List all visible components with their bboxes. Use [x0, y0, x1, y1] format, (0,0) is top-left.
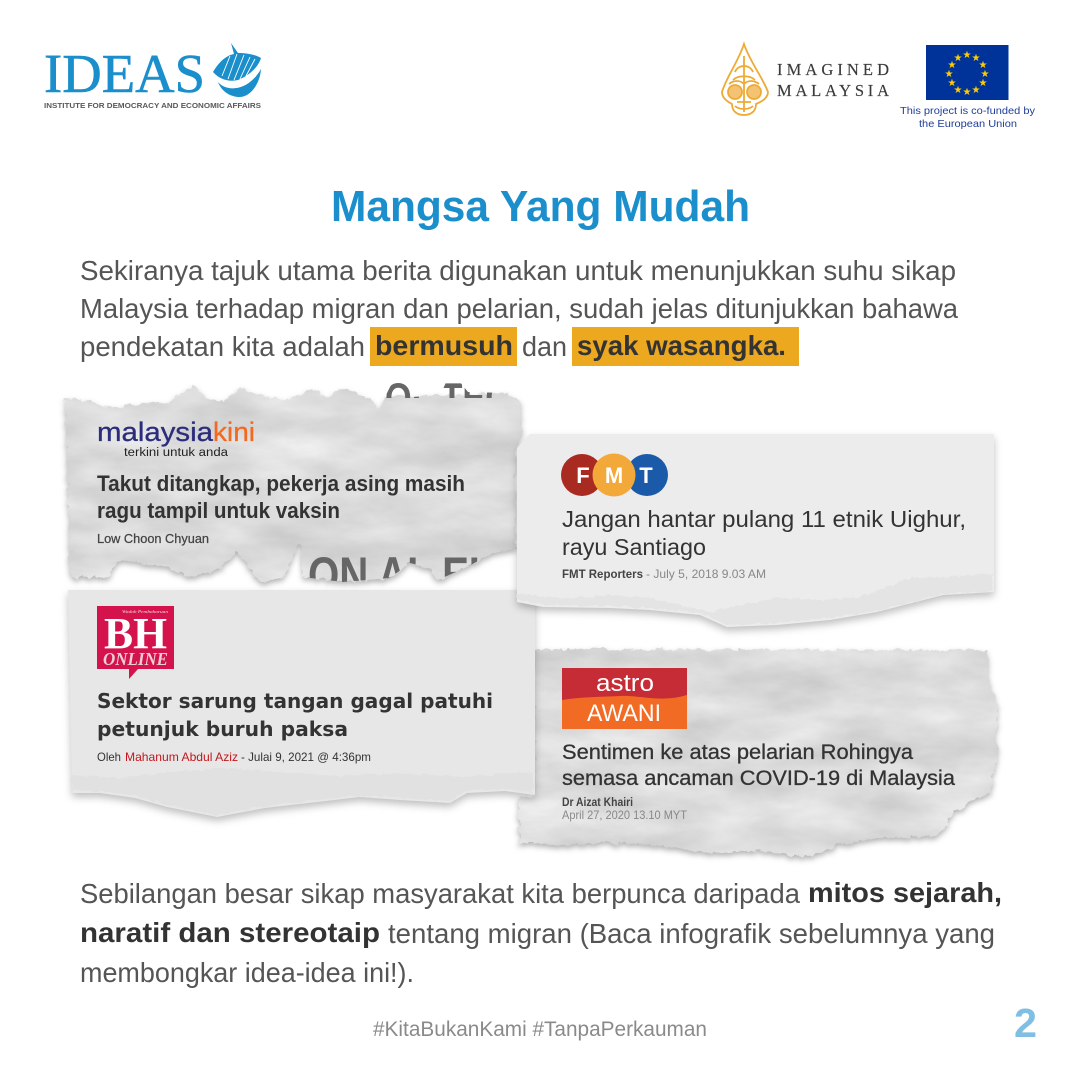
Astro Awani byline: Dr Aizat Khairi: [562, 797, 633, 809]
icon: EU flag: ★: [979, 78, 988, 89]
EU co-funding badge: [900, 45, 1036, 130]
Astro Awani logo: AWANI: [587, 700, 661, 727]
BH Online headline: [97, 689, 493, 741]
torn headline remnant, bottom: ON AL EU: [308, 547, 498, 603]
hashtags: #KitaBukanKami #TanpaPerkauman: [373, 1018, 707, 1041]
BH Online logo: [97, 606, 174, 679]
intro paragraph: Sekiranya tajuk utama berita digunakan untuk menunjukkan suhu sikap: [80, 255, 956, 286]
panel: FMT clipping: [517, 434, 994, 627]
FMT headline: [562, 506, 966, 560]
closing paragraph: [80, 877, 1002, 988]
FMT logo: [561, 454, 668, 496]
torn headline remnant, top: OL TEC: [385, 374, 510, 421]
Malaysiakini headline: Takut ditangkap, pekerja asing masih: [97, 471, 465, 496]
icon: EU flag: [926, 45, 1008, 100]
icon: EU flag: ★: [972, 53, 981, 64]
closing paragraph: mitos sejarah,: [808, 877, 1002, 908]
FMT headline: Jangan hantar pulang 11 etnik Uighur,: [562, 506, 966, 532]
torn paper 3: [68, 590, 535, 817]
FMT byline: - July 5, 2018 9.03 AM: [646, 567, 766, 581]
torn lower edge band: [517, 573, 992, 625]
page number: 2: [1014, 1000, 1037, 1046]
Malaysiakini logo: [97, 417, 255, 459]
torn lower edge band: [71, 768, 533, 815]
BH Online logo: ONLINE: [103, 649, 168, 669]
intro paragraph: pendekatan kita adalah: [80, 331, 365, 362]
FMT headline: rayu Santiago: [562, 534, 706, 560]
EU caption: This project is co-funded by: [900, 105, 1036, 117]
torn paper 1: [65, 385, 522, 583]
IDEAS subtitle: INSTITUTE FOR DEMOCRACY AND ECONOMIC AFFAIRS: [44, 101, 261, 110]
torn paper 2: [517, 434, 994, 627]
Astro Awani headline: Sentimen ke atas pelarian Rohingya: [562, 740, 913, 764]
icon: EU flag: ★: [981, 69, 990, 80]
Malaysiakini headline: ragu tampil untuk vaksin: [97, 498, 340, 523]
BH Online byline: Mahanum Abdul Aziz: [125, 750, 238, 764]
Malaysiakini byline: Low Choon Chyuan: [97, 532, 209, 546]
intro paragraph: Malaysia terhadap migran dan pelarian, sudah jelas ditunjukkan bahawa: [80, 293, 958, 324]
FMT logo: T: [639, 463, 653, 488]
BH Online headline: Sektor sarung tangan gagal patuhi: [97, 689, 493, 713]
IDEAS wordmark: IDEAS: [44, 43, 205, 104]
FMT logo: F: [576, 463, 590, 488]
Malaysiakini headline: [97, 471, 465, 523]
Astro Awani headline: [562, 740, 955, 790]
BH Online logo: BH: [104, 609, 167, 658]
Astro Awani logo: [562, 668, 687, 729]
panel: Malaysiakini clipping: [65, 374, 522, 603]
icon: EU flag: ★: [954, 85, 963, 96]
closing paragraph: naratif dan stereotaip: [80, 917, 380, 948]
highlight: syak wasangka: syak wasangka.: [577, 330, 786, 361]
icon: EU flag: ★: [954, 53, 963, 64]
panel: BH Online clipping: [68, 590, 535, 817]
panel: Astro Awani clipping: [518, 649, 998, 857]
icon: EU flag: ★: [963, 50, 972, 61]
icon: EU flag: ★: [948, 60, 957, 71]
Imagined Malaysia wordmark: MALAYSIA: [777, 81, 889, 100]
icon: EU flag: ★: [963, 87, 972, 98]
icon: wayang kulit: [722, 44, 768, 115]
title: Mangsa Yang Mudah: [331, 182, 750, 231]
BH Online headline: petunjuk buruh paksa: [97, 717, 348, 741]
EU caption: the European Union: [919, 118, 1017, 130]
BH Online byline: [97, 750, 371, 764]
BH Online byline: Oleh: [97, 750, 121, 764]
Imagined Malaysia wordmark: IMAGINED: [777, 60, 889, 79]
IDEAS logo: [44, 43, 261, 110]
closing paragraph: membongkar idea-idea ini!).: [80, 957, 414, 988]
Malaysiakini logo: terkini untuk anda: [124, 447, 229, 459]
closing paragraph: tentang migran (Baca infografik sebelumnya yang: [388, 918, 995, 949]
icon: EU flag: ★: [979, 60, 988, 71]
Astro Awani byline: [562, 797, 688, 822]
FMT byline: FMT Reporters: [562, 567, 643, 581]
FMT byline: [562, 567, 766, 581]
Astro Awani headline: semasa ancaman COVID-19 di Malaysia: [562, 766, 955, 790]
Imagined Malaysia logo: [722, 44, 889, 115]
icon: EU flag: ★: [972, 85, 981, 96]
intro paragraph: dan: [522, 331, 567, 362]
Malaysiakini logo: kini: [213, 417, 255, 447]
icon: EU flag: ★: [945, 69, 954, 80]
EU caption: [900, 105, 1036, 130]
highlight: bermusuh: bermusuh: [375, 330, 513, 361]
torn paper 4: [518, 649, 998, 857]
Imagined Malaysia wordmark: [777, 60, 889, 100]
icon: EU flag: ★: [948, 78, 957, 89]
Astro Awani byline: April 27, 2020 13.10 MYT: [562, 808, 688, 822]
Astro Awani logo: astro: [596, 670, 654, 697]
FMT logo: M: [605, 463, 623, 488]
intro paragraph: [80, 255, 958, 366]
Malaysiakini logo: malaysia: [97, 417, 214, 447]
icon: IDEAS bird: [213, 43, 261, 97]
closing paragraph: Sebilangan besar sikap masyarakat kita berpunca daripada: [80, 878, 800, 909]
BH Online byline: - Julai 9, 2021 @ 4:36pm: [241, 750, 371, 764]
BH Online logo: Wadah Pembaharuan: [122, 609, 169, 614]
